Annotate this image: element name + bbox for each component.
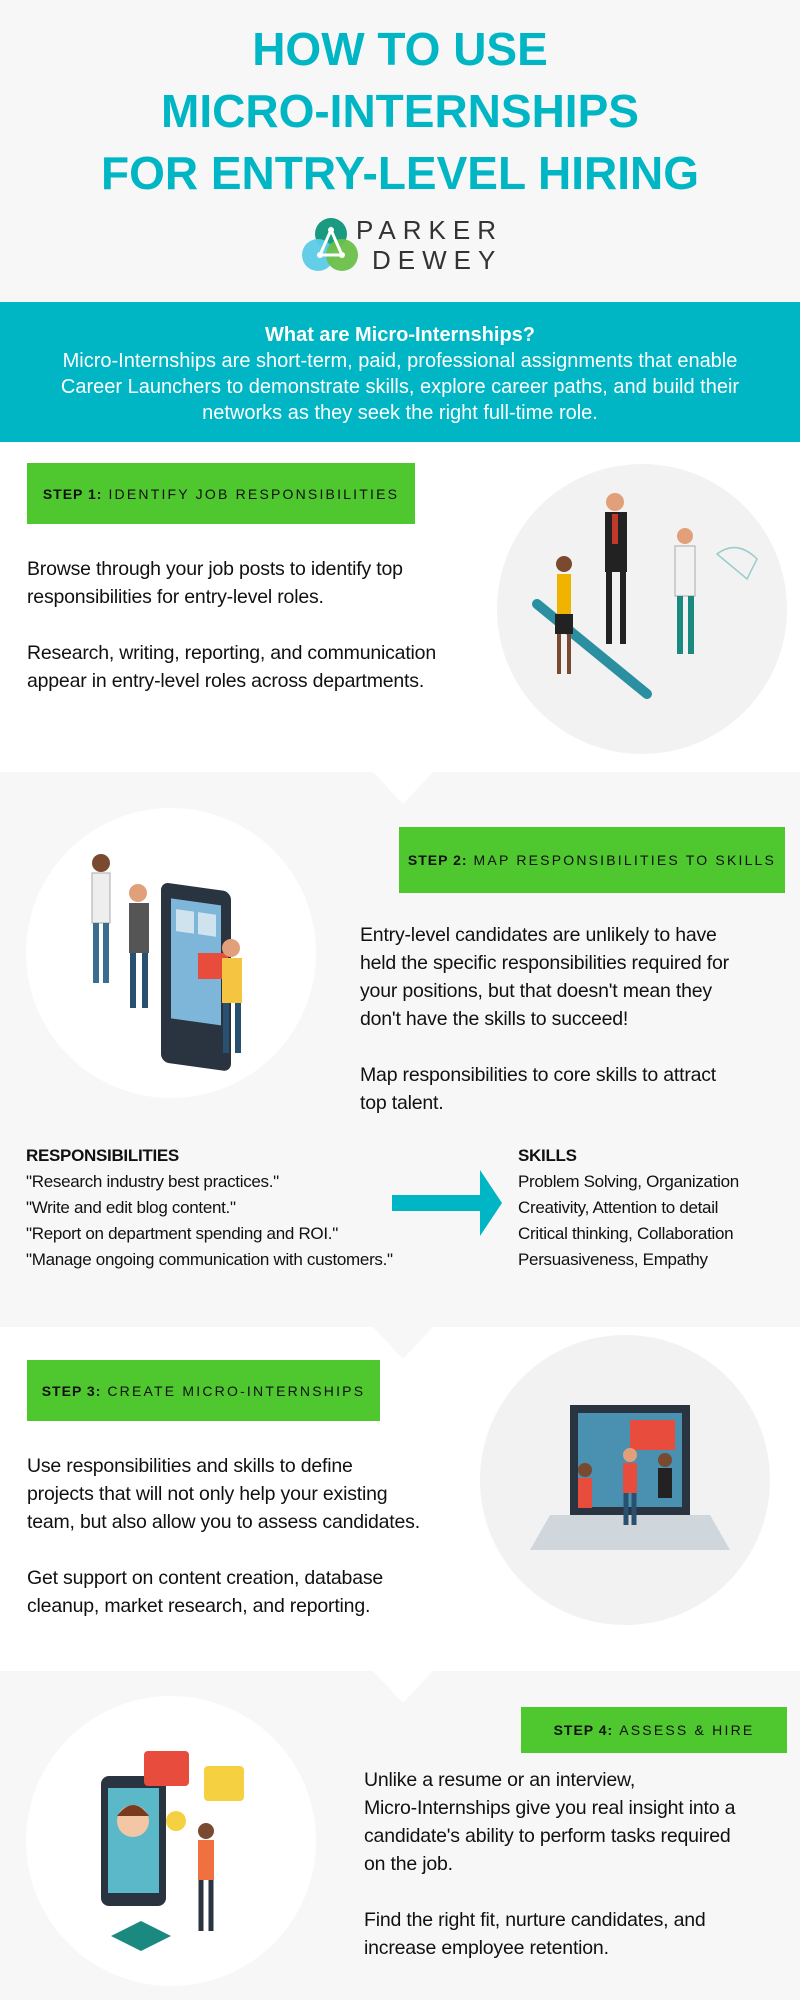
step 4 text	[364, 1769, 736, 1959]
step 3 text: Use responsibilities and skills to define	[27, 1455, 353, 1477]
step 3 text: team, but also allow you to assess candidates.	[27, 1511, 420, 1533]
banner: what are micro-internships: Micro-Internships are short-term, paid, professional assignments that enable	[63, 350, 737, 372]
logo: PARKER	[356, 215, 503, 245]
banner: what are micro-internships	[0, 302, 800, 442]
responsibilities list: "Manage ongoing communication with customers."	[26, 1250, 393, 1269]
skills list: SKILLS	[518, 1146, 577, 1165]
responsibilities list: RESPONSIBILITIES	[26, 1146, 179, 1165]
panel: step 4	[0, 1671, 800, 2000]
notch	[373, 772, 433, 804]
step 3 label: STEP 3:	[42, 1382, 101, 1398]
step 2 label: STEP 2:	[408, 852, 468, 868]
logo: DEWEY	[372, 245, 502, 275]
step 2 text: don't have the skills to succeed!	[360, 1008, 628, 1030]
notch	[373, 1327, 433, 1359]
step 3 text: projects that will not only help your existing	[27, 1483, 387, 1505]
step 2 text: top talent.	[360, 1092, 443, 1114]
logo	[302, 215, 503, 275]
step 1 label: IDENTIFY JOB RESPONSIBILITIES	[108, 486, 399, 502]
step 1 text: appear in entry-level roles across departments.	[27, 670, 424, 692]
responsibilities list: "Write and edit blog content."	[26, 1198, 236, 1217]
skills list	[518, 1146, 739, 1269]
step 4 text: increase employee retention.	[364, 1937, 609, 1959]
step 4 label	[521, 1707, 787, 1753]
icon: tablet illustration	[26, 808, 316, 1098]
skills list: Problem Solving, Organization	[518, 1172, 739, 1191]
step 2 text: Entry-level candidates are unlikely to have	[360, 924, 717, 946]
skills list: Critical thinking, Collaboration	[518, 1224, 733, 1243]
step 4 text: Micro-Internships give you real insight into a	[364, 1797, 735, 1819]
step 2 text: held the specific responsibilities required for	[360, 952, 729, 974]
step 2 text	[360, 924, 729, 1114]
header background	[0, 0, 800, 302]
step 3 text: cleanup, market research, and reporting.	[27, 1595, 370, 1617]
title	[101, 23, 699, 199]
step 1 text: Research, writing, reporting, and communication	[27, 642, 436, 664]
step 2 label	[399, 827, 785, 893]
step 1 text	[27, 558, 436, 692]
title: HOW TO USE	[252, 23, 548, 75]
step 1 text: Browse through your job posts to identify top	[27, 558, 403, 580]
step 1 text: responsibilities for entry-level roles.	[27, 586, 324, 608]
step 2 label: MAP RESPONSIBILITIES TO SKILLS	[474, 852, 776, 868]
notch	[373, 1671, 433, 1703]
step 1 label: STEP 1:	[43, 486, 102, 502]
step 4 text: candidate's ability to perform tasks required	[364, 1825, 730, 1847]
step 3 text: Get support on content creation, database	[27, 1567, 383, 1589]
step 1 label	[27, 463, 415, 524]
step 4 label: STEP 4:	[554, 1722, 613, 1738]
step 4 label: ASSESS & HIRE	[619, 1722, 754, 1738]
skills list: Creativity, Attention to detail	[518, 1198, 718, 1217]
responsibilities list: "Report on department spending and ROI."	[26, 1224, 338, 1243]
panel: step 1	[0, 442, 800, 772]
step 3 text	[27, 1455, 420, 1617]
icon: team with pencil illustration	[497, 464, 787, 754]
step 4 text: on the job.	[364, 1853, 453, 1875]
step 4 text: Unlike a resume or an interview,	[364, 1769, 635, 1791]
panel: step 3	[0, 1327, 800, 1671]
step 3 label: CREATE MICRO-INTERNSHIPS	[107, 1382, 365, 1398]
banner: what are micro-internships: Career Launchers to demonstrate skills, explore career paths, and build their	[61, 376, 739, 398]
panel: step 2	[0, 772, 800, 1327]
step 2 text: your positions, but that doesn't mean they	[360, 980, 712, 1002]
icon: laptop illustration	[480, 1335, 770, 1625]
responsibilities list	[26, 1146, 393, 1269]
icon: phone with bulb illustration	[26, 1696, 316, 1986]
title: MICRO-INTERNSHIPS	[161, 85, 639, 137]
skills list: Persuasiveness, Empathy	[518, 1250, 708, 1269]
responsibilities list: "Research industry best practices."	[26, 1172, 279, 1191]
arrow	[392, 1170, 502, 1236]
step 4 text: Find the right fit, nurture candidates, and	[364, 1909, 706, 1931]
title: FOR ENTRY-LEVEL HIRING	[101, 147, 699, 199]
banner: what are micro-internships: What are Micro-Internships?	[265, 324, 535, 346]
step 3 label	[27, 1360, 380, 1421]
step 2 text: Map responsibilities to core skills to attract	[360, 1064, 716, 1086]
banner: what are micro-internships: networks as they seek the right full-time role.	[202, 402, 598, 424]
